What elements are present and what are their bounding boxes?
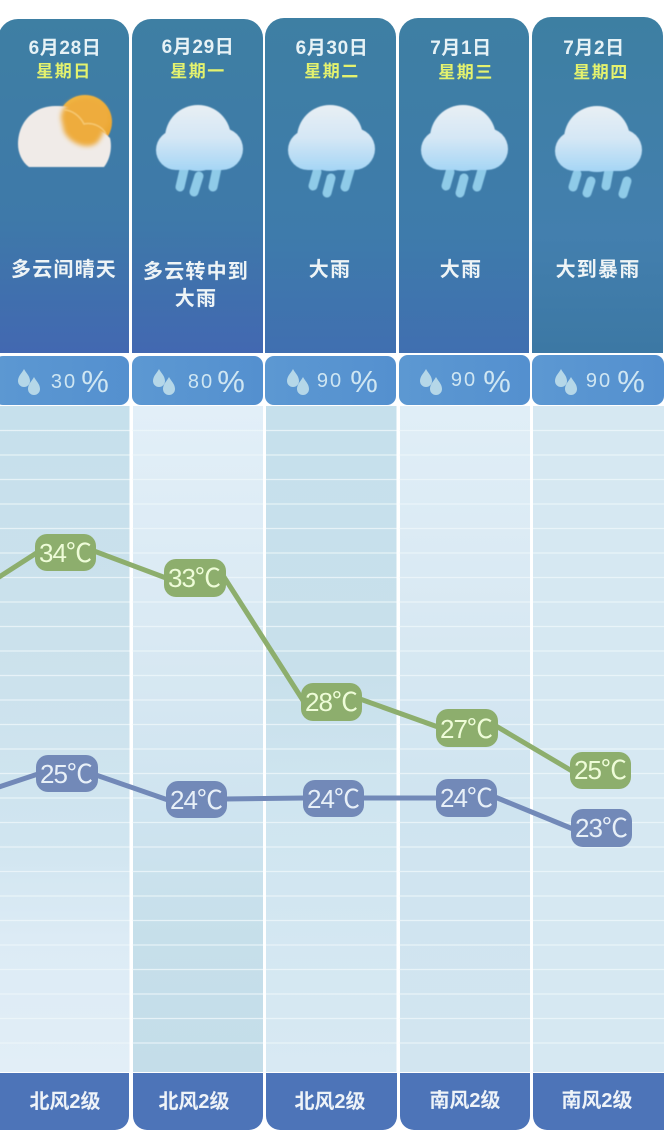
conditions	[11, 258, 640, 310]
condition day 3: 大雨	[309, 258, 351, 281]
date 7月2日: 7月2日	[563, 38, 625, 59]
header card day 3	[265, 18, 396, 353]
icon: drops day 2	[153, 369, 175, 395]
chip day 5	[532, 355, 664, 405]
date 6月30日: 6月30日	[296, 38, 368, 59]
pill 33℃	[164, 559, 226, 597]
panel: header cards	[0, 17, 663, 353]
line chart: low temperature	[0, 755, 632, 847]
chip day 3	[265, 356, 396, 405]
pill 25℃: 25℃	[40, 759, 92, 789]
pill 24℃	[436, 779, 497, 817]
pill 24℃: 24℃	[170, 785, 222, 815]
percent sign: %	[483, 364, 511, 399]
wind day 1	[0, 1073, 129, 1130]
rain 90: 90	[317, 370, 343, 392]
pill 24℃	[303, 780, 364, 817]
dates	[29, 37, 625, 59]
header card day 5	[532, 17, 663, 353]
chip day 2	[132, 356, 263, 405]
wind day 2: 北风2级	[158, 1090, 230, 1113]
pill 33℃: 33℃	[168, 563, 220, 593]
icon: drops day 1	[18, 369, 40, 395]
chip day 1	[0, 356, 129, 405]
pill 24℃	[166, 781, 227, 818]
icon: drops day 5	[555, 369, 577, 395]
rain 90: 90	[586, 370, 612, 392]
pill 24℃: 24℃	[307, 784, 359, 814]
pill 24℃: 24℃	[440, 783, 492, 813]
panel: rain chance chips	[0, 355, 664, 405]
icon: rain cloud day 3	[288, 105, 375, 193]
wind day 4: 南风2级	[429, 1089, 501, 1112]
header card day 4	[399, 18, 529, 353]
wind day 3: 北风2级	[294, 1090, 366, 1113]
wind day 5: 南风2级	[561, 1089, 633, 1112]
pill 25℃	[570, 752, 631, 789]
condition day 5: 大到暴雨	[556, 258, 640, 281]
icon: rain cloud day 4	[421, 105, 508, 193]
condition day 1: 多云间晴天	[11, 258, 117, 281]
weekday 星期四: 星期四	[573, 63, 629, 82]
chip day 4	[399, 355, 530, 405]
pill 27℃: 27℃	[440, 714, 492, 744]
percent sign: %	[217, 364, 245, 399]
pill 34℃: 34℃	[39, 538, 91, 568]
pill 28℃: 28℃	[305, 687, 357, 717]
pill 28℃	[301, 683, 362, 721]
header card day 2	[132, 19, 263, 353]
percent sign: %	[350, 364, 378, 399]
condition day 2: 多云转中到	[143, 260, 249, 283]
icon: drops day 3	[287, 369, 309, 395]
pill 23℃: 23℃	[575, 813, 627, 843]
weekday 星期三: 星期三	[438, 63, 494, 82]
percent sign: %	[617, 364, 645, 399]
icon: rain cloud day 2	[156, 105, 243, 192]
wind day 4	[400, 1073, 530, 1130]
pill 27℃	[436, 709, 498, 747]
icon: sun behind cloud	[18, 95, 112, 167]
wind day 5	[533, 1073, 664, 1130]
pill 34℃	[35, 534, 96, 571]
wind day 1: 北风2级	[29, 1090, 101, 1113]
panel: temperature chart columns	[0, 405, 664, 1072]
pill 25℃: 25℃	[574, 755, 626, 785]
weekday 星期日: 星期日	[36, 62, 92, 81]
icon: rain cloud day 5	[555, 106, 642, 194]
date 6月28日: 6月28日	[29, 38, 101, 59]
rain 30: 30	[51, 371, 77, 393]
wind day 3	[266, 1073, 397, 1130]
condition day 4: 大雨	[440, 258, 482, 281]
weekday 星期一: 星期一	[170, 62, 226, 81]
condition day 2 second line: 大雨	[175, 287, 217, 310]
rain 90: 90	[451, 369, 477, 391]
wind day 2	[133, 1073, 263, 1130]
date 7月1日: 7月1日	[430, 38, 492, 59]
weekday 星期二: 星期二	[304, 62, 360, 81]
date 6月29日: 6月29日	[162, 37, 234, 58]
line chart: high temperature	[0, 534, 631, 789]
percent sign: %	[81, 364, 109, 399]
rain 80: 80	[188, 371, 214, 393]
pill 25℃	[36, 755, 98, 792]
panel: wind footer	[0, 1073, 664, 1130]
header card day 1	[0, 19, 129, 353]
pill 23℃	[571, 809, 632, 847]
icon: drops day 4	[420, 369, 442, 395]
weekdays	[36, 62, 629, 82]
